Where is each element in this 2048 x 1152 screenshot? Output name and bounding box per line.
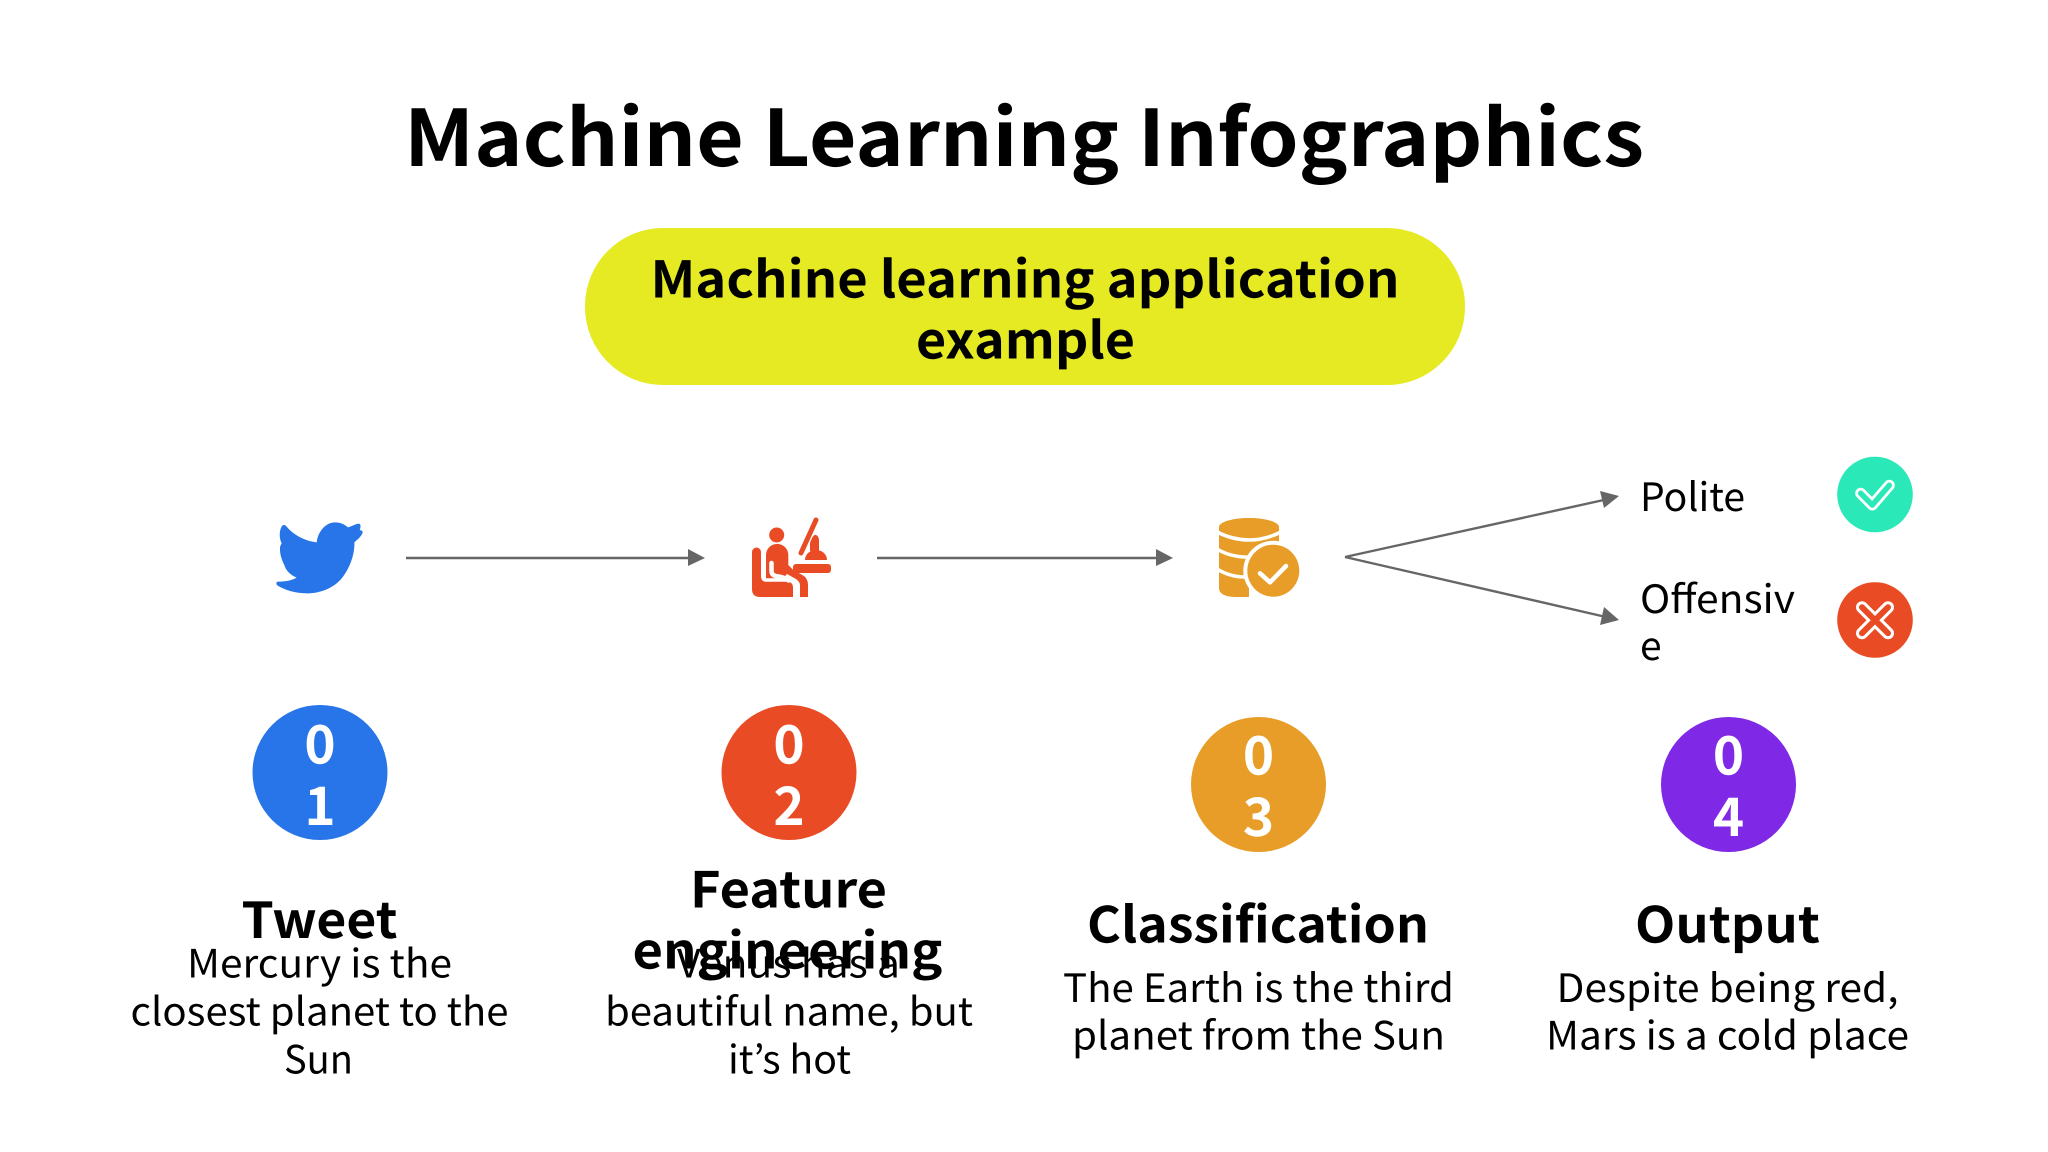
step 02: feature engineering bbox=[605, 704, 973, 1086]
icon: database with check bbox=[1217, 518, 1303, 601]
arrow: classification to polite bbox=[1345, 491, 1619, 557]
subtitle pill bbox=[585, 228, 1465, 385]
subtitle pill: Machine learning application bbox=[650, 238, 1400, 312]
arrow: tweet to features bbox=[406, 549, 705, 566]
step 02: feature engineering: Feature bbox=[690, 852, 887, 922]
label: offensive: Offensiv bbox=[1640, 569, 1795, 625]
step 03: classification: planet from the Sun bbox=[1072, 1006, 1445, 1062]
arrow: features to classification bbox=[877, 549, 1173, 566]
step 04: output: Despite being red, bbox=[1556, 958, 1898, 1014]
step 01: tweet: Tweet bbox=[242, 882, 398, 953]
step 02: feature engineering: Venus has a bbox=[677, 934, 900, 990]
subtitle pill: example bbox=[916, 300, 1135, 374]
title: Machine Learning Infographics bbox=[404, 77, 1644, 189]
step 02: feature engineering: it’s hot bbox=[728, 1030, 851, 1086]
step 01: tweet bbox=[130, 704, 508, 1086]
step 03: classification: The Earth is the third bbox=[1063, 958, 1454, 1014]
icon: offensive cross bbox=[1837, 582, 1913, 658]
icon: person at desk bbox=[752, 520, 831, 597]
step 03: classification: Classification bbox=[1087, 886, 1429, 958]
step 04: output bbox=[1546, 714, 1909, 1062]
step 03: classification bbox=[1063, 714, 1454, 1062]
step 01: tweet: Mercury is the bbox=[187, 934, 452, 990]
step 02: feature engineering: 0 bbox=[773, 704, 805, 780]
step 01: tweet: closest planet to the bbox=[130, 982, 508, 1038]
label: polite: Polite bbox=[1640, 467, 1745, 523]
step 03: classification: 3 bbox=[1243, 776, 1274, 852]
step 02: feature engineering: beautiful name, but bbox=[605, 982, 973, 1038]
label: offensive: e bbox=[1640, 616, 1662, 672]
step 02: feature engineering: 2 bbox=[773, 765, 805, 841]
label: offensive bbox=[1640, 569, 1795, 672]
icon: twitter bird bbox=[276, 522, 363, 593]
step 04: output: Output bbox=[1635, 886, 1820, 958]
step 01: tweet: Sun bbox=[284, 1030, 353, 1086]
icon: polite check bbox=[1837, 457, 1913, 532]
step 03: classification: 0 bbox=[1243, 714, 1274, 790]
step 04: output: Mars is a cold place bbox=[1546, 1006, 1909, 1062]
arrow: classification to offensive bbox=[1345, 557, 1619, 625]
step 04: output: 0 bbox=[1713, 714, 1744, 790]
step 02: feature engineering: engineering bbox=[632, 912, 942, 984]
step 01: tweet: 1 bbox=[304, 765, 336, 841]
step 04: output: 4 bbox=[1713, 776, 1744, 852]
step 01: tweet: 0 bbox=[304, 704, 336, 780]
